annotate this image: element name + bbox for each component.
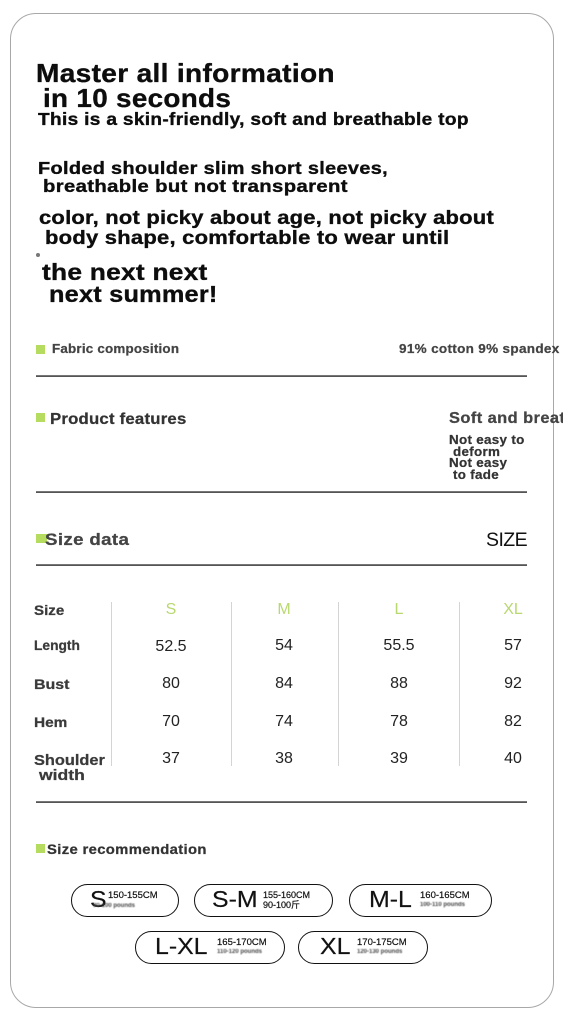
pill: S — [71, 884, 179, 917]
pill: L-XL: L-XL — [155, 933, 207, 959]
product features row — [36, 410, 563, 482]
label: Size recommendation — [47, 842, 207, 857]
subtitle: This is a skin-friendly, soft and breathable top — [38, 109, 469, 129]
marker — [36, 844, 45, 853]
table header: S — [166, 601, 176, 618]
product features row: to fade — [453, 467, 499, 482]
description: shoulder: Folded shoulder slim short sleeves, — [38, 158, 388, 178]
closing line — [42, 259, 218, 307]
row: bust — [34, 675, 522, 692]
description: fit — [39, 207, 494, 249]
product features row: deform — [453, 444, 500, 459]
description: shoulder: breathable but not transparent — [43, 176, 348, 196]
pill: S-M: 155-160CM — [263, 890, 310, 900]
table header: Size — [34, 602, 64, 618]
row: shoulder width — [34, 750, 522, 784]
pill: S: 90-100 pounds — [93, 903, 135, 909]
row: bust: 80 — [162, 675, 180, 692]
row: bust: 88 — [390, 675, 408, 692]
description: fit: body shape, comfortable to wear until — [45, 227, 449, 249]
row: length: 54 — [275, 637, 293, 654]
closing line: next summer! — [49, 281, 218, 307]
row: bust: Bust — [34, 676, 69, 692]
row: bust: 84 — [275, 675, 293, 692]
pill: S: 150-155CM — [108, 890, 158, 901]
marker — [36, 413, 45, 422]
row: length: 55.5 — [383, 637, 415, 654]
pill: S-M — [194, 884, 333, 917]
pill: XL: 170-175CM — [357, 937, 407, 948]
feature: not easy to fade: Not easy — [449, 455, 507, 470]
pill: M-L: 160-165CM — [420, 890, 470, 901]
row: hem: 78 — [390, 713, 408, 730]
marker — [36, 534, 47, 543]
marker — [36, 345, 45, 354]
label: Product features — [50, 411, 186, 428]
table header: M — [277, 601, 291, 618]
pill: L-XL: 110-120 pounds — [217, 949, 262, 955]
label: Fabric composition — [52, 341, 179, 356]
label: Size data — [45, 531, 129, 549]
row: shoulder width: 37 — [162, 750, 180, 767]
row: length: 52.5 — [155, 638, 187, 655]
size tag: SIZE — [486, 529, 527, 551]
size recommendation heading — [36, 842, 207, 857]
value: 91% cotton 9% spandex — [399, 341, 560, 356]
pill: L-XL: 165-170CM — [217, 937, 267, 948]
row: shoulder width: Shoulder — [34, 752, 105, 769]
row: shoulder width: 40 — [504, 750, 522, 767]
row: hem: 70 — [162, 713, 180, 730]
row: hem: 74 — [275, 713, 293, 730]
pill: XL: XL — [320, 933, 350, 959]
row: hem — [34, 713, 522, 730]
title: in 10 seconds — [43, 83, 231, 113]
title — [36, 58, 335, 113]
feature: not easy to deform: Not easy to — [449, 432, 525, 447]
row: shoulder width: 38 — [275, 750, 293, 767]
row: length: Length — [34, 638, 80, 653]
pill: L-XL — [135, 931, 285, 964]
pill: S-M: 90-100斤 — [263, 900, 300, 910]
table header: XL — [503, 601, 523, 618]
row: shoulder width: 39 — [390, 750, 408, 767]
table column rules — [111, 602, 460, 766]
table header: L — [395, 601, 403, 618]
title: Master all information — [36, 58, 335, 88]
description: shoulder — [38, 158, 388, 196]
closing line: the next next — [42, 259, 208, 285]
pill: S-M: S-M — [212, 886, 258, 912]
size data heading — [36, 529, 527, 551]
pill: XL: 120-130 pounds — [357, 949, 402, 955]
pill: M-L: 100-110 pounds — [420, 902, 465, 908]
row: bust: 92 — [504, 675, 522, 692]
row: shoulder width: width — [39, 767, 85, 784]
row: hem: 82 — [504, 713, 522, 730]
row: length: 57 — [504, 637, 522, 654]
row: length — [34, 637, 522, 655]
pill: M-L — [349, 884, 492, 917]
fabric composition row — [36, 341, 560, 356]
pill: XL — [298, 931, 428, 964]
stray dot — [36, 253, 40, 257]
pill: S: S — [90, 886, 107, 912]
pill: M-L: M-L — [369, 886, 412, 912]
table header — [34, 601, 523, 618]
row: hem: Hem — [34, 714, 67, 730]
description: fit: color, not picky about age, not picky about — [39, 207, 494, 229]
